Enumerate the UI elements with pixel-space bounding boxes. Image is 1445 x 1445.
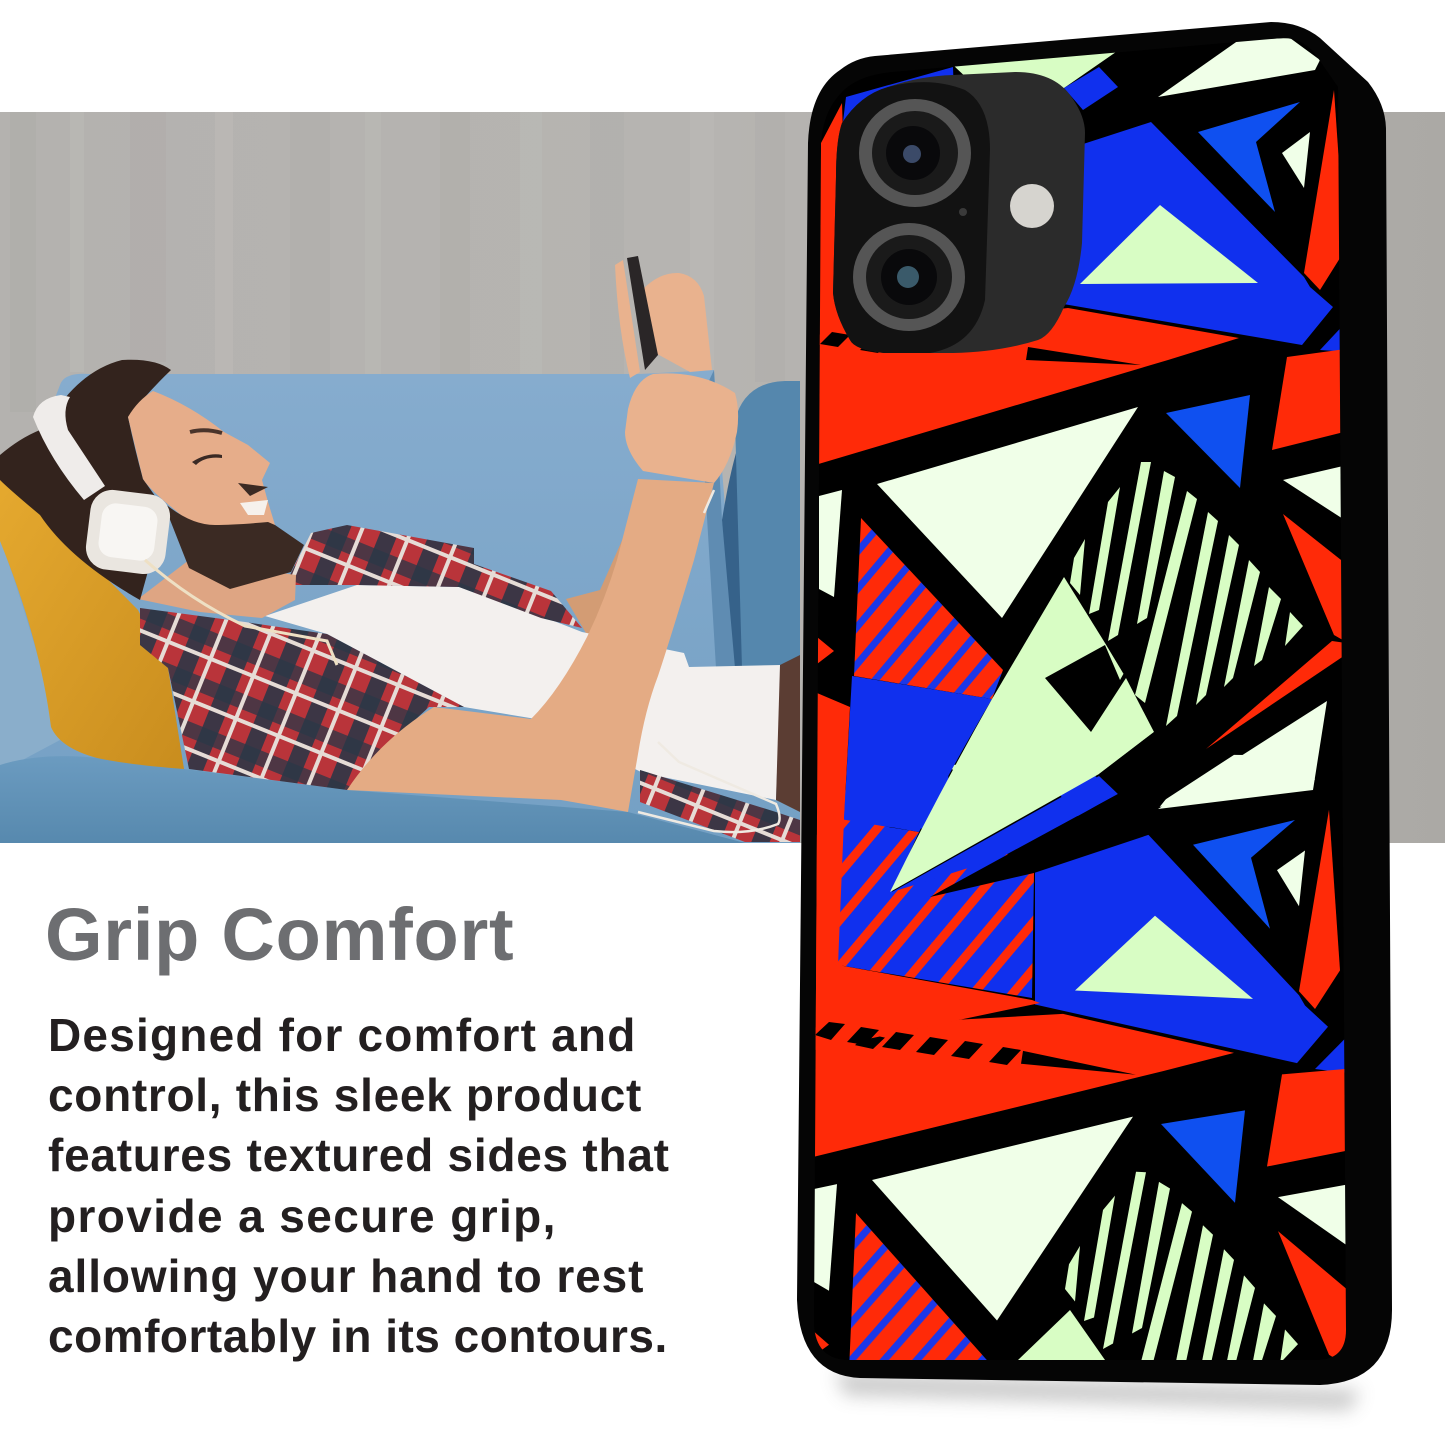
plaid shirt lower	[140, 608, 464, 790]
hair back	[0, 360, 171, 600]
body text: provide a secure grip,	[48, 1190, 557, 1242]
black streak	[930, 732, 1166, 897]
body text: control, this sleek product	[48, 1069, 642, 1121]
jeans	[776, 655, 800, 812]
lower hand	[625, 373, 738, 483]
upper hand	[615, 260, 712, 378]
phone case body	[797, 22, 1392, 1385]
blue block	[844, 676, 992, 832]
body text: comfortably in its contours.	[48, 1310, 668, 1362]
far arm	[566, 500, 680, 640]
white lower triangle	[1158, 701, 1327, 809]
big green shard	[890, 577, 1154, 892]
yellow pillow	[0, 471, 184, 769]
man: body, shirt, arms, head	[0, 256, 800, 842]
near arm	[347, 479, 714, 812]
lower green shard	[1018, 1310, 1105, 1360]
sofa	[0, 370, 800, 843]
striped blue patch	[838, 819, 1034, 998]
heading: Grip Comfort	[45, 893, 514, 976]
camera lens bottom	[853, 223, 965, 331]
face	[128, 391, 275, 560]
headphones	[33, 395, 780, 832]
left red strip	[815, 693, 1040, 1050]
microphone dot	[959, 208, 967, 216]
eye and brow	[192, 454, 222, 465]
phone case shadow	[835, 1372, 1360, 1410]
camera lens top	[859, 99, 971, 207]
black arrow on shard	[1045, 645, 1126, 732]
neck	[138, 560, 296, 618]
blue edge under shard	[892, 776, 1118, 892]
camera island	[833, 72, 1085, 353]
body text: features textured sides that	[48, 1129, 670, 1181]
moustache and teeth	[238, 483, 268, 496]
lower repeat of pattern	[814, 754, 1346, 1360]
held phone	[627, 256, 658, 370]
beard	[163, 502, 304, 589]
white t-shirt	[265, 585, 781, 800]
phone case printed pattern	[814, 38, 1346, 1360]
flash	[1010, 184, 1054, 228]
body text	[48, 1009, 670, 1362]
dashes	[815, 1022, 1021, 1065]
plaid shirt tail	[640, 770, 800, 842]
wall background	[0, 112, 1445, 843]
plaid shirt collar	[285, 525, 582, 628]
body text: Designed for comfort and	[48, 1009, 637, 1061]
upper pattern	[815, 38, 1360, 726]
body text: allowing your hand to rest	[48, 1250, 644, 1302]
thin red shard	[1206, 641, 1342, 749]
